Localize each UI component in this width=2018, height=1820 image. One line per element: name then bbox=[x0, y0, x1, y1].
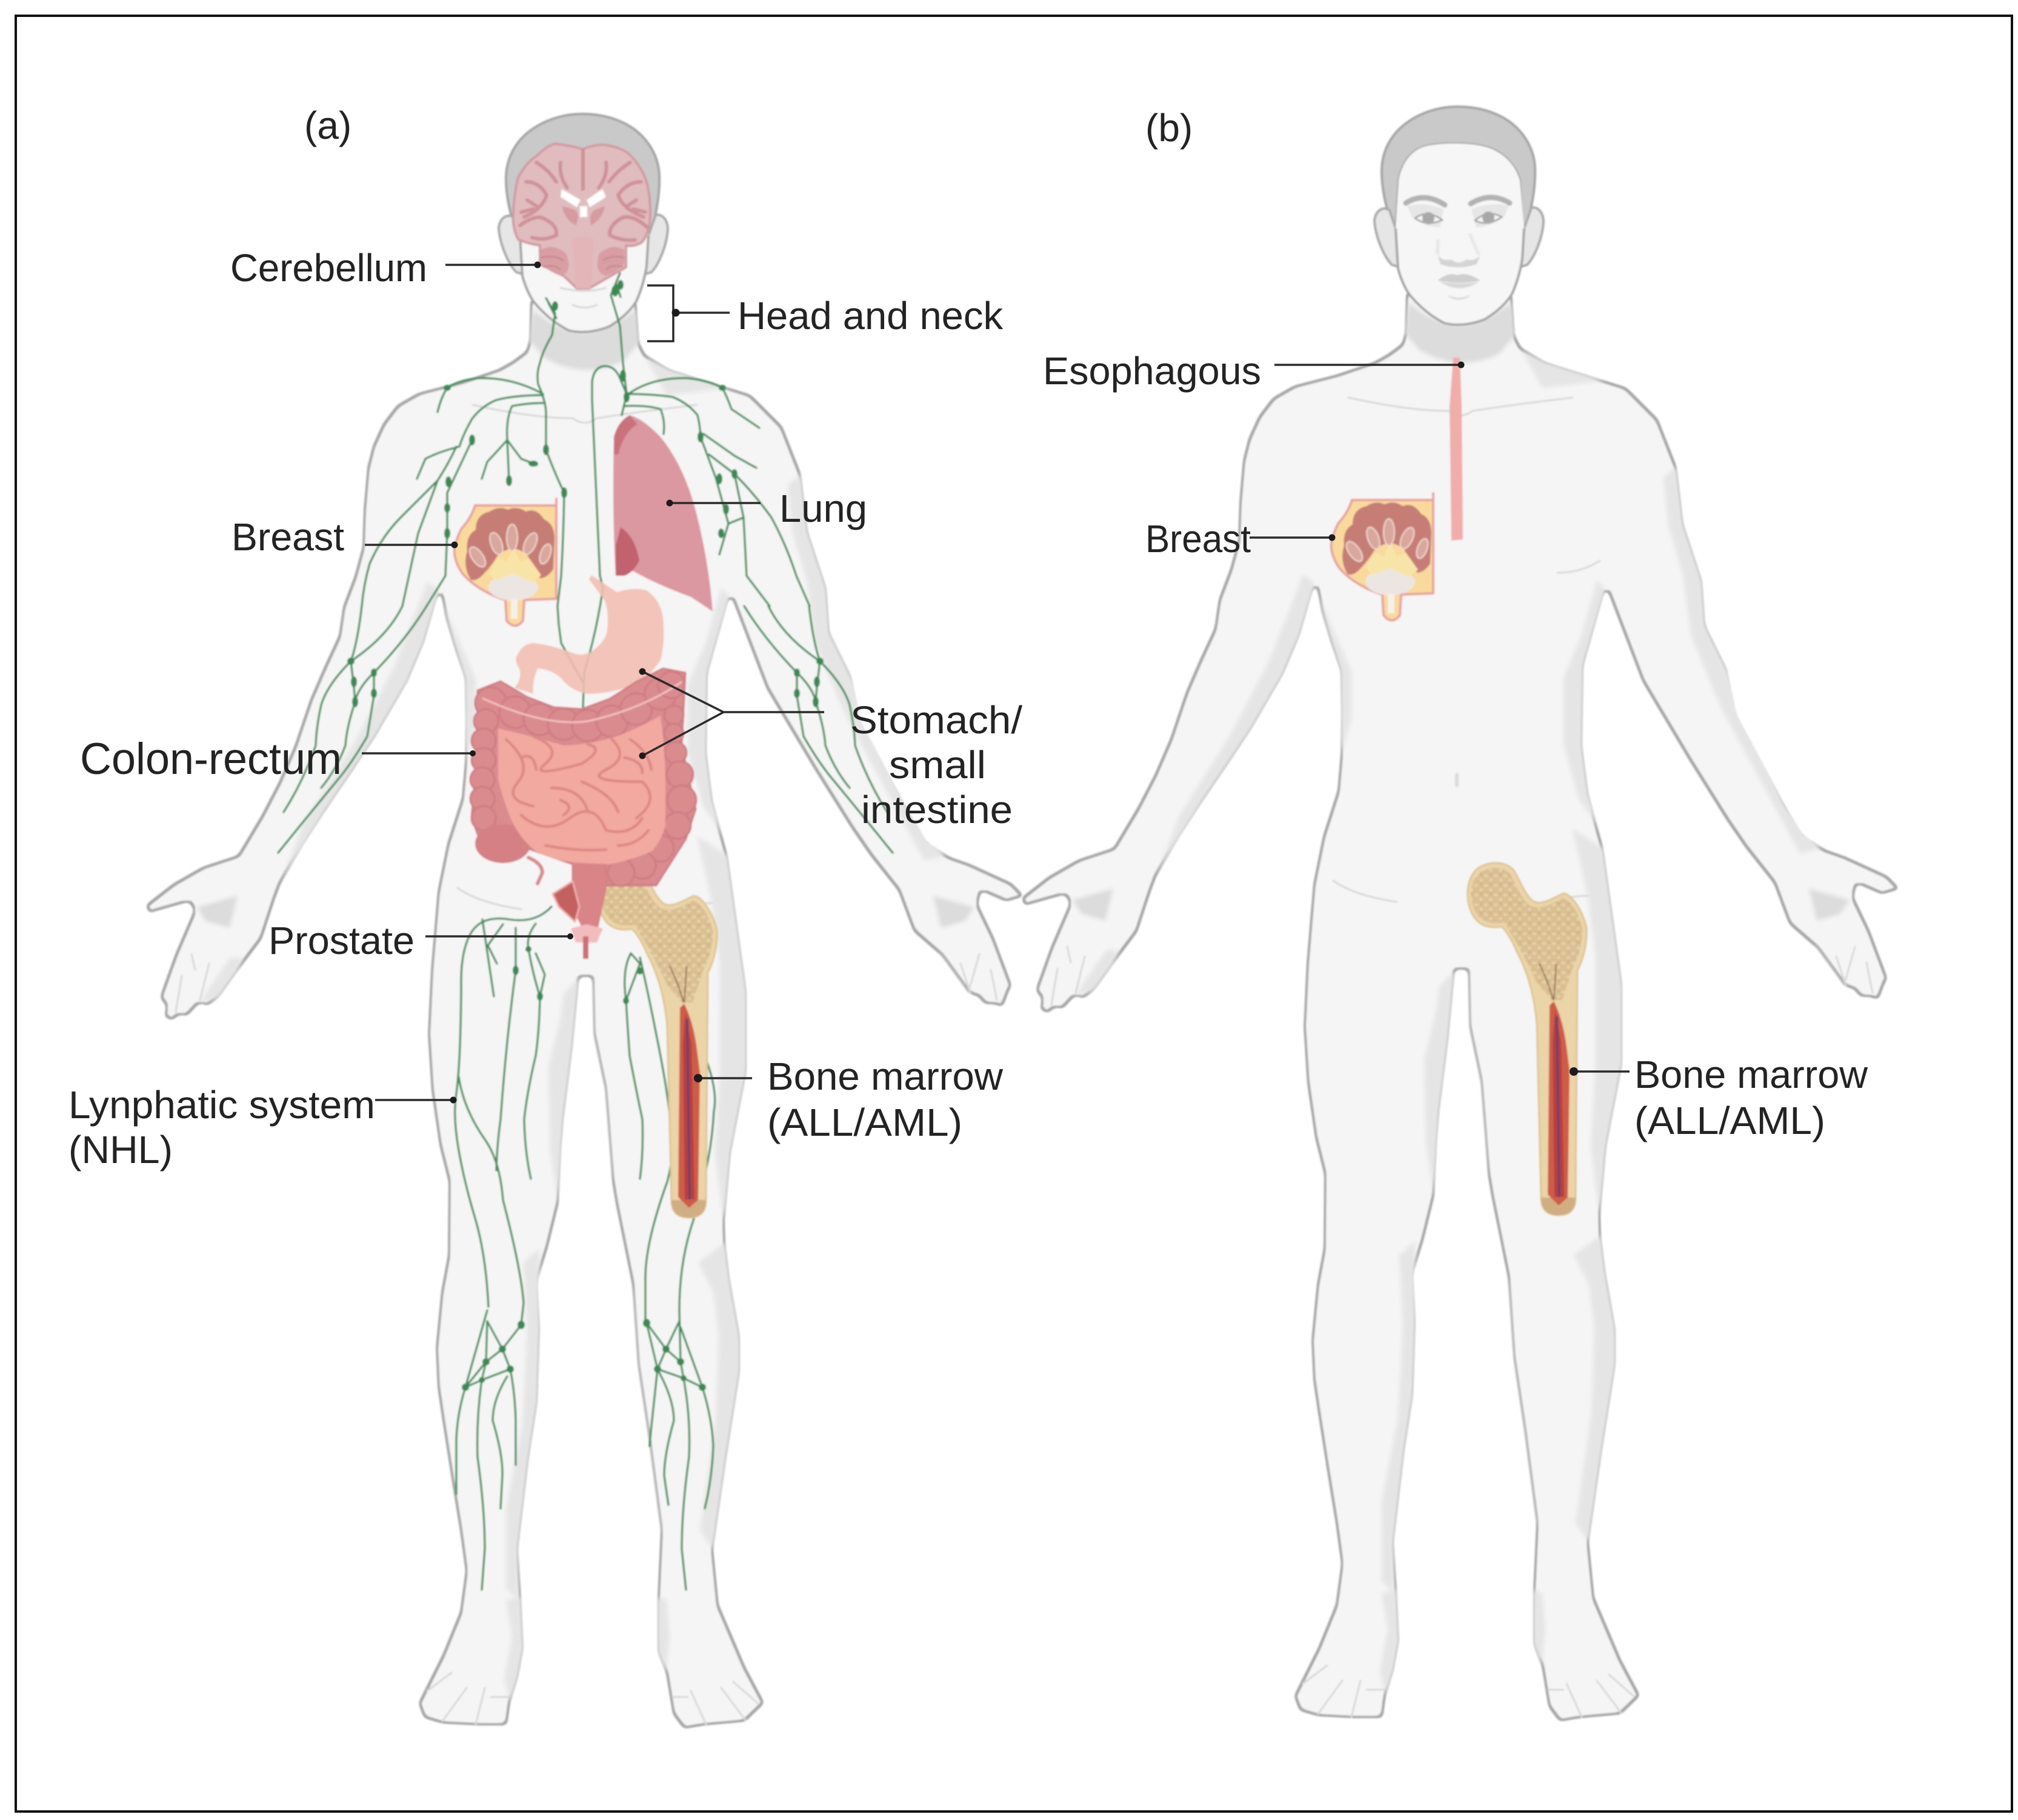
label: Head and neck: Head and neck bbox=[738, 294, 1004, 338]
pectoral crease bbox=[1557, 561, 1600, 573]
label: Lymphatic system: (NHL) bbox=[68, 1128, 173, 1172]
navel bbox=[1455, 775, 1459, 785]
label: Esophagous: Esophagous bbox=[1043, 349, 1261, 393]
femur b bbox=[1468, 863, 1587, 1215]
stomach bbox=[514, 575, 664, 694]
body outline a bbox=[145, 114, 1025, 1729]
label: Bone marrow b: (ALL/AML) bbox=[1634, 1099, 1825, 1142]
label: Prostate: Prostate bbox=[268, 919, 415, 962]
label: Bone marrow b: Bone marrow bbox=[1634, 1053, 1868, 1096]
label: Head and neck bbox=[647, 285, 1004, 341]
lung bbox=[613, 415, 713, 612]
figure a: body with organs bbox=[145, 114, 1025, 1729]
face features bbox=[1406, 198, 1510, 299]
label: Breast b bbox=[1145, 517, 1336, 561]
femur a bbox=[598, 865, 717, 1218]
panel label (a): (a) bbox=[304, 104, 351, 147]
label: Cerebellum: Cerebellum bbox=[230, 246, 427, 290]
label: Esophagous bbox=[1043, 349, 1464, 393]
label: Stomach / small intestine bbox=[639, 668, 1022, 832]
figure b: body with organs bbox=[1021, 107, 1900, 1722]
breast b bbox=[1331, 493, 1433, 621]
colon bbox=[470, 668, 696, 897]
label: Bone marrow a: (ALL/AML) bbox=[767, 1101, 962, 1144]
brain bbox=[513, 144, 650, 288]
label: Stomach / small intestine: small bbox=[889, 743, 986, 787]
label: Stomach / small intestine: intestine bbox=[861, 788, 1013, 832]
lymph nodes bbox=[347, 280, 824, 1391]
label: Lung: Lung bbox=[779, 487, 867, 530]
label: Lymphatic system bbox=[68, 1083, 457, 1172]
esophagus bbox=[1450, 358, 1463, 541]
rectum, bladder and prostate bbox=[553, 864, 607, 959]
breast a bbox=[455, 499, 556, 625]
body outline b bbox=[1021, 107, 1900, 1722]
label: Bone marrow b bbox=[1570, 1053, 1868, 1142]
panel label (b): (b) bbox=[1145, 106, 1193, 150]
label: Cerebellum bbox=[230, 246, 541, 290]
label: Breast a bbox=[231, 515, 458, 559]
label: Colon-rectum bbox=[80, 735, 476, 784]
label: Breast b: Breast bbox=[1145, 517, 1251, 561]
label: Lung bbox=[667, 487, 867, 530]
label: Bone marrow a bbox=[694, 1055, 1004, 1144]
mouth and chin a bbox=[561, 288, 606, 308]
label: Breast a: Breast bbox=[231, 515, 344, 559]
label: Prostate bbox=[268, 919, 573, 962]
label: Bone marrow a: Bone marrow bbox=[767, 1055, 1004, 1098]
label: Stomach / small intestine: Stomach/ bbox=[850, 698, 1022, 742]
lymphatic system bbox=[278, 273, 893, 1590]
left forearm lymph bbox=[278, 606, 427, 853]
label: Lymphatic system: Lynphatic system bbox=[68, 1083, 375, 1127]
right forearm lymph bbox=[744, 606, 893, 853]
appendix bbox=[528, 858, 542, 884]
small intestine bbox=[498, 716, 665, 864]
label: Colon-rectum: Colon-rectum bbox=[80, 735, 342, 784]
